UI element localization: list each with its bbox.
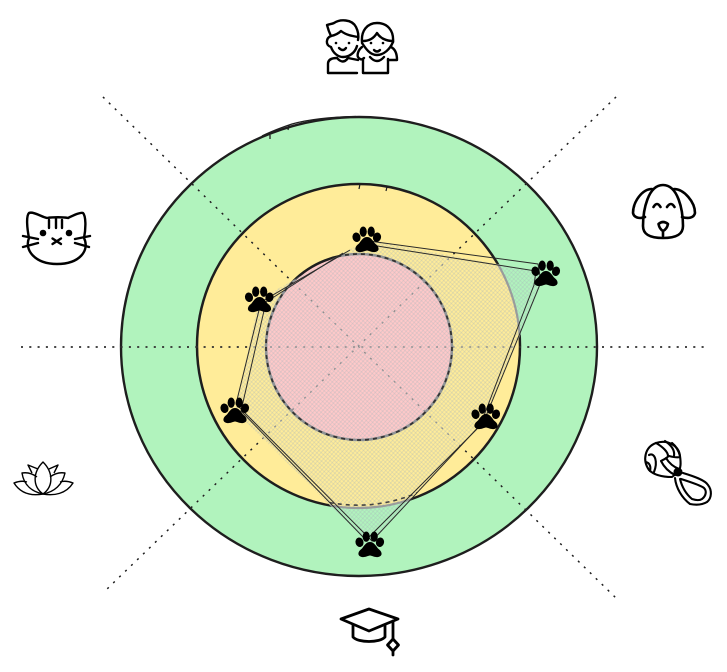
- paw: bottom: [354, 532, 385, 557]
- paw: upper left: [244, 286, 275, 312]
- icon: graduation cap: [341, 609, 398, 655]
- paw markers: [219, 226, 561, 557]
- icon: lotus: [14, 462, 73, 495]
- dotted axes: [21, 97, 705, 598]
- paw: right: [530, 260, 561, 286]
- icon: children: [327, 20, 397, 73]
- hatched data polygon: [236, 241, 540, 542]
- icon: cat: [23, 213, 90, 264]
- ring: middle yellow: [197, 184, 520, 508]
- icon: dog: [633, 185, 695, 238]
- paw: top: [351, 226, 382, 252]
- icon: rope toy: [645, 441, 711, 505]
- paw: lower left: [219, 398, 250, 423]
- ring: outer green: [121, 116, 597, 576]
- paw: lower right: [470, 404, 501, 429]
- ring: inner pink: [266, 254, 452, 440]
